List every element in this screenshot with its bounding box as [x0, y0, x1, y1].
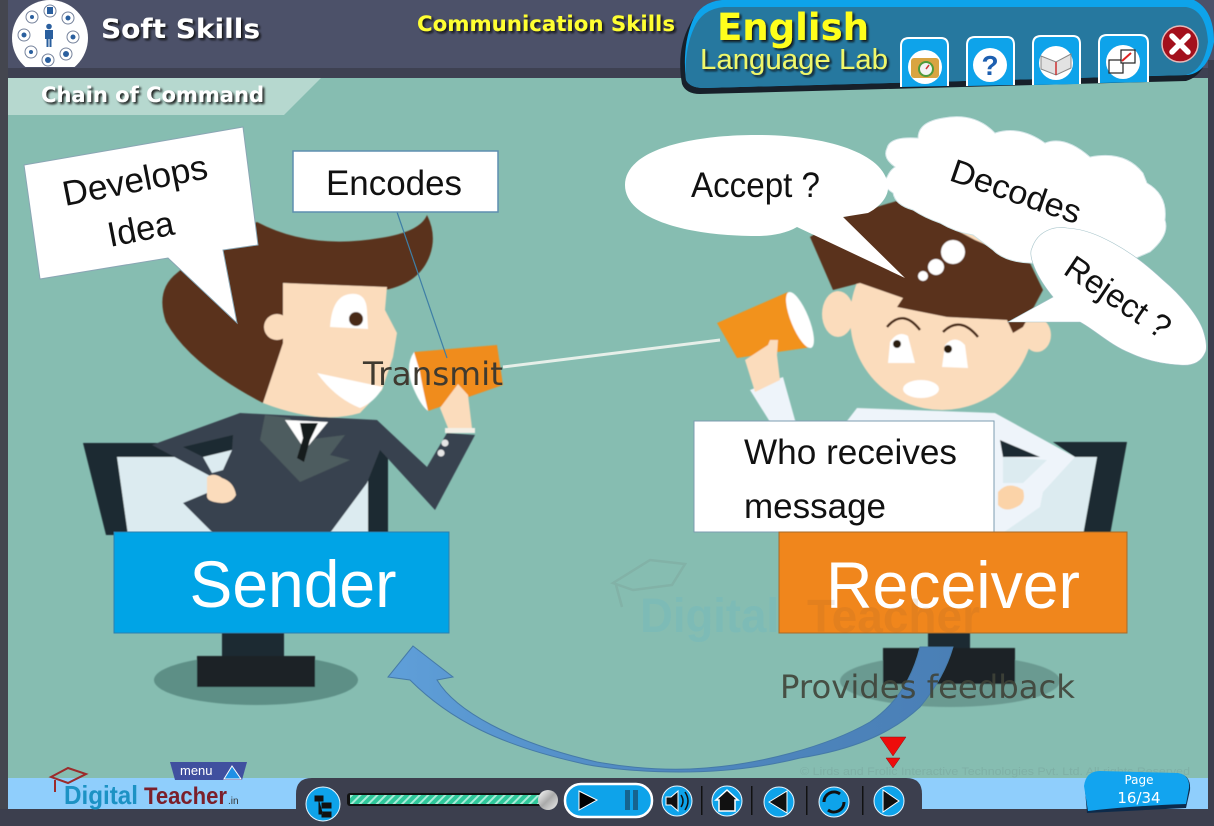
bubble: reject: [1008, 228, 1206, 365]
subheading band: chain of command: Chain of Command: [41, 83, 264, 107]
text: reject: Reject ?: [1058, 248, 1178, 346]
text: idea: Idea: [104, 204, 178, 255]
button: window resize: [1099, 35, 1148, 83]
mouth: receiver: [903, 380, 939, 398]
soft skills logo: [12, 0, 88, 67]
sender illustration: [83, 215, 503, 705]
subheading band: chain of command: [8, 78, 321, 115]
copyright: © Lirds and Frolic Interactive Technologies Pvt. Ltd. All rights Reserved: [800, 766, 1190, 778]
hand and cup: sender: [414, 345, 503, 411]
title: language lab: Language Lab: [700, 44, 888, 76]
text: encodes: Encodes: [326, 164, 462, 203]
text: develops: Develops: [59, 148, 211, 214]
face: sender: [263, 283, 397, 417]
button: outline: [306, 787, 340, 821]
ears: receiver: [822, 291, 854, 337]
button: sound: [662, 786, 692, 816]
button: close: [1162, 26, 1198, 62]
top header bar: [0, 0, 1214, 68]
bubble: develops idea: [24, 127, 258, 323]
button: book: [1033, 36, 1080, 85]
heading: communication skills: Communication Skills: [417, 12, 675, 36]
string between cups: [503, 340, 720, 367]
callout: who receives message: [694, 421, 994, 532]
smile: sender: [317, 373, 383, 408]
progress bar: [347, 790, 558, 810]
button: previous: [764, 787, 794, 817]
eye: sender: [330, 294, 368, 329]
watermark: Digital: [640, 590, 779, 643]
thought dots: [918, 240, 965, 281]
bubble: decodes: [885, 117, 1166, 265]
box: receiver: [779, 532, 1127, 633]
face: receiver: [850, 226, 1034, 410]
control bar: [296, 778, 922, 826]
hair: receiver: [810, 200, 1043, 333]
page counter: Page: [1124, 773, 1154, 787]
cup and hand: receiver: [717, 292, 812, 358]
button: next: [874, 786, 904, 816]
watermark: Teacher: [807, 590, 980, 642]
bottom strip: [8, 778, 1208, 809]
feedback curved arrow: [388, 646, 953, 772]
box: receiver: Receiver: [826, 548, 1080, 622]
text: accept: Accept ?: [691, 166, 820, 205]
monitor: sender: [83, 443, 388, 705]
label: transmit: Transmit: [362, 355, 503, 393]
menu tab: [170, 762, 247, 780]
text: who receives: Who receives: [744, 433, 957, 472]
title: english: English: [717, 6, 869, 49]
button: home: [712, 786, 742, 816]
callout: encodes: [293, 151, 498, 358]
monitor: receiver: [840, 442, 1127, 707]
digital teacher logo: .in: [228, 796, 239, 807]
heading: soft skills: Soft Skills: [101, 14, 260, 45]
box: sender: [114, 532, 449, 633]
suit: sender: [152, 413, 475, 533]
button: folder clock: [901, 38, 948, 87]
button: help: ?: [981, 50, 999, 81]
button: help: [967, 37, 1014, 86]
play pause pill: [565, 784, 652, 817]
page counter: [1084, 771, 1190, 813]
digital teacher logo: [51, 768, 239, 810]
eyes: receiver: [888, 334, 915, 363]
text: message: message: [744, 487, 886, 526]
hair: sender: [162, 215, 433, 403]
receiver illustration: [717, 200, 1127, 707]
box: sender: Sender: [190, 547, 396, 621]
english language lab panel: [680, 0, 1214, 94]
bubble: accept: [625, 135, 905, 278]
digital teacher logo: Teacher: [144, 783, 227, 810]
watermark: [613, 560, 980, 643]
digital teacher logo: Digital: [64, 780, 138, 810]
red pointer: [880, 737, 906, 768]
menu tab: menu: [180, 763, 213, 778]
label: provides feedback: Provides feedback: [780, 668, 1075, 706]
page counter: 16/34: [1117, 789, 1161, 807]
shirt: receiver: [750, 377, 1075, 535]
button: refresh: [819, 787, 849, 817]
text: decodes: Decodes: [946, 152, 1086, 231]
